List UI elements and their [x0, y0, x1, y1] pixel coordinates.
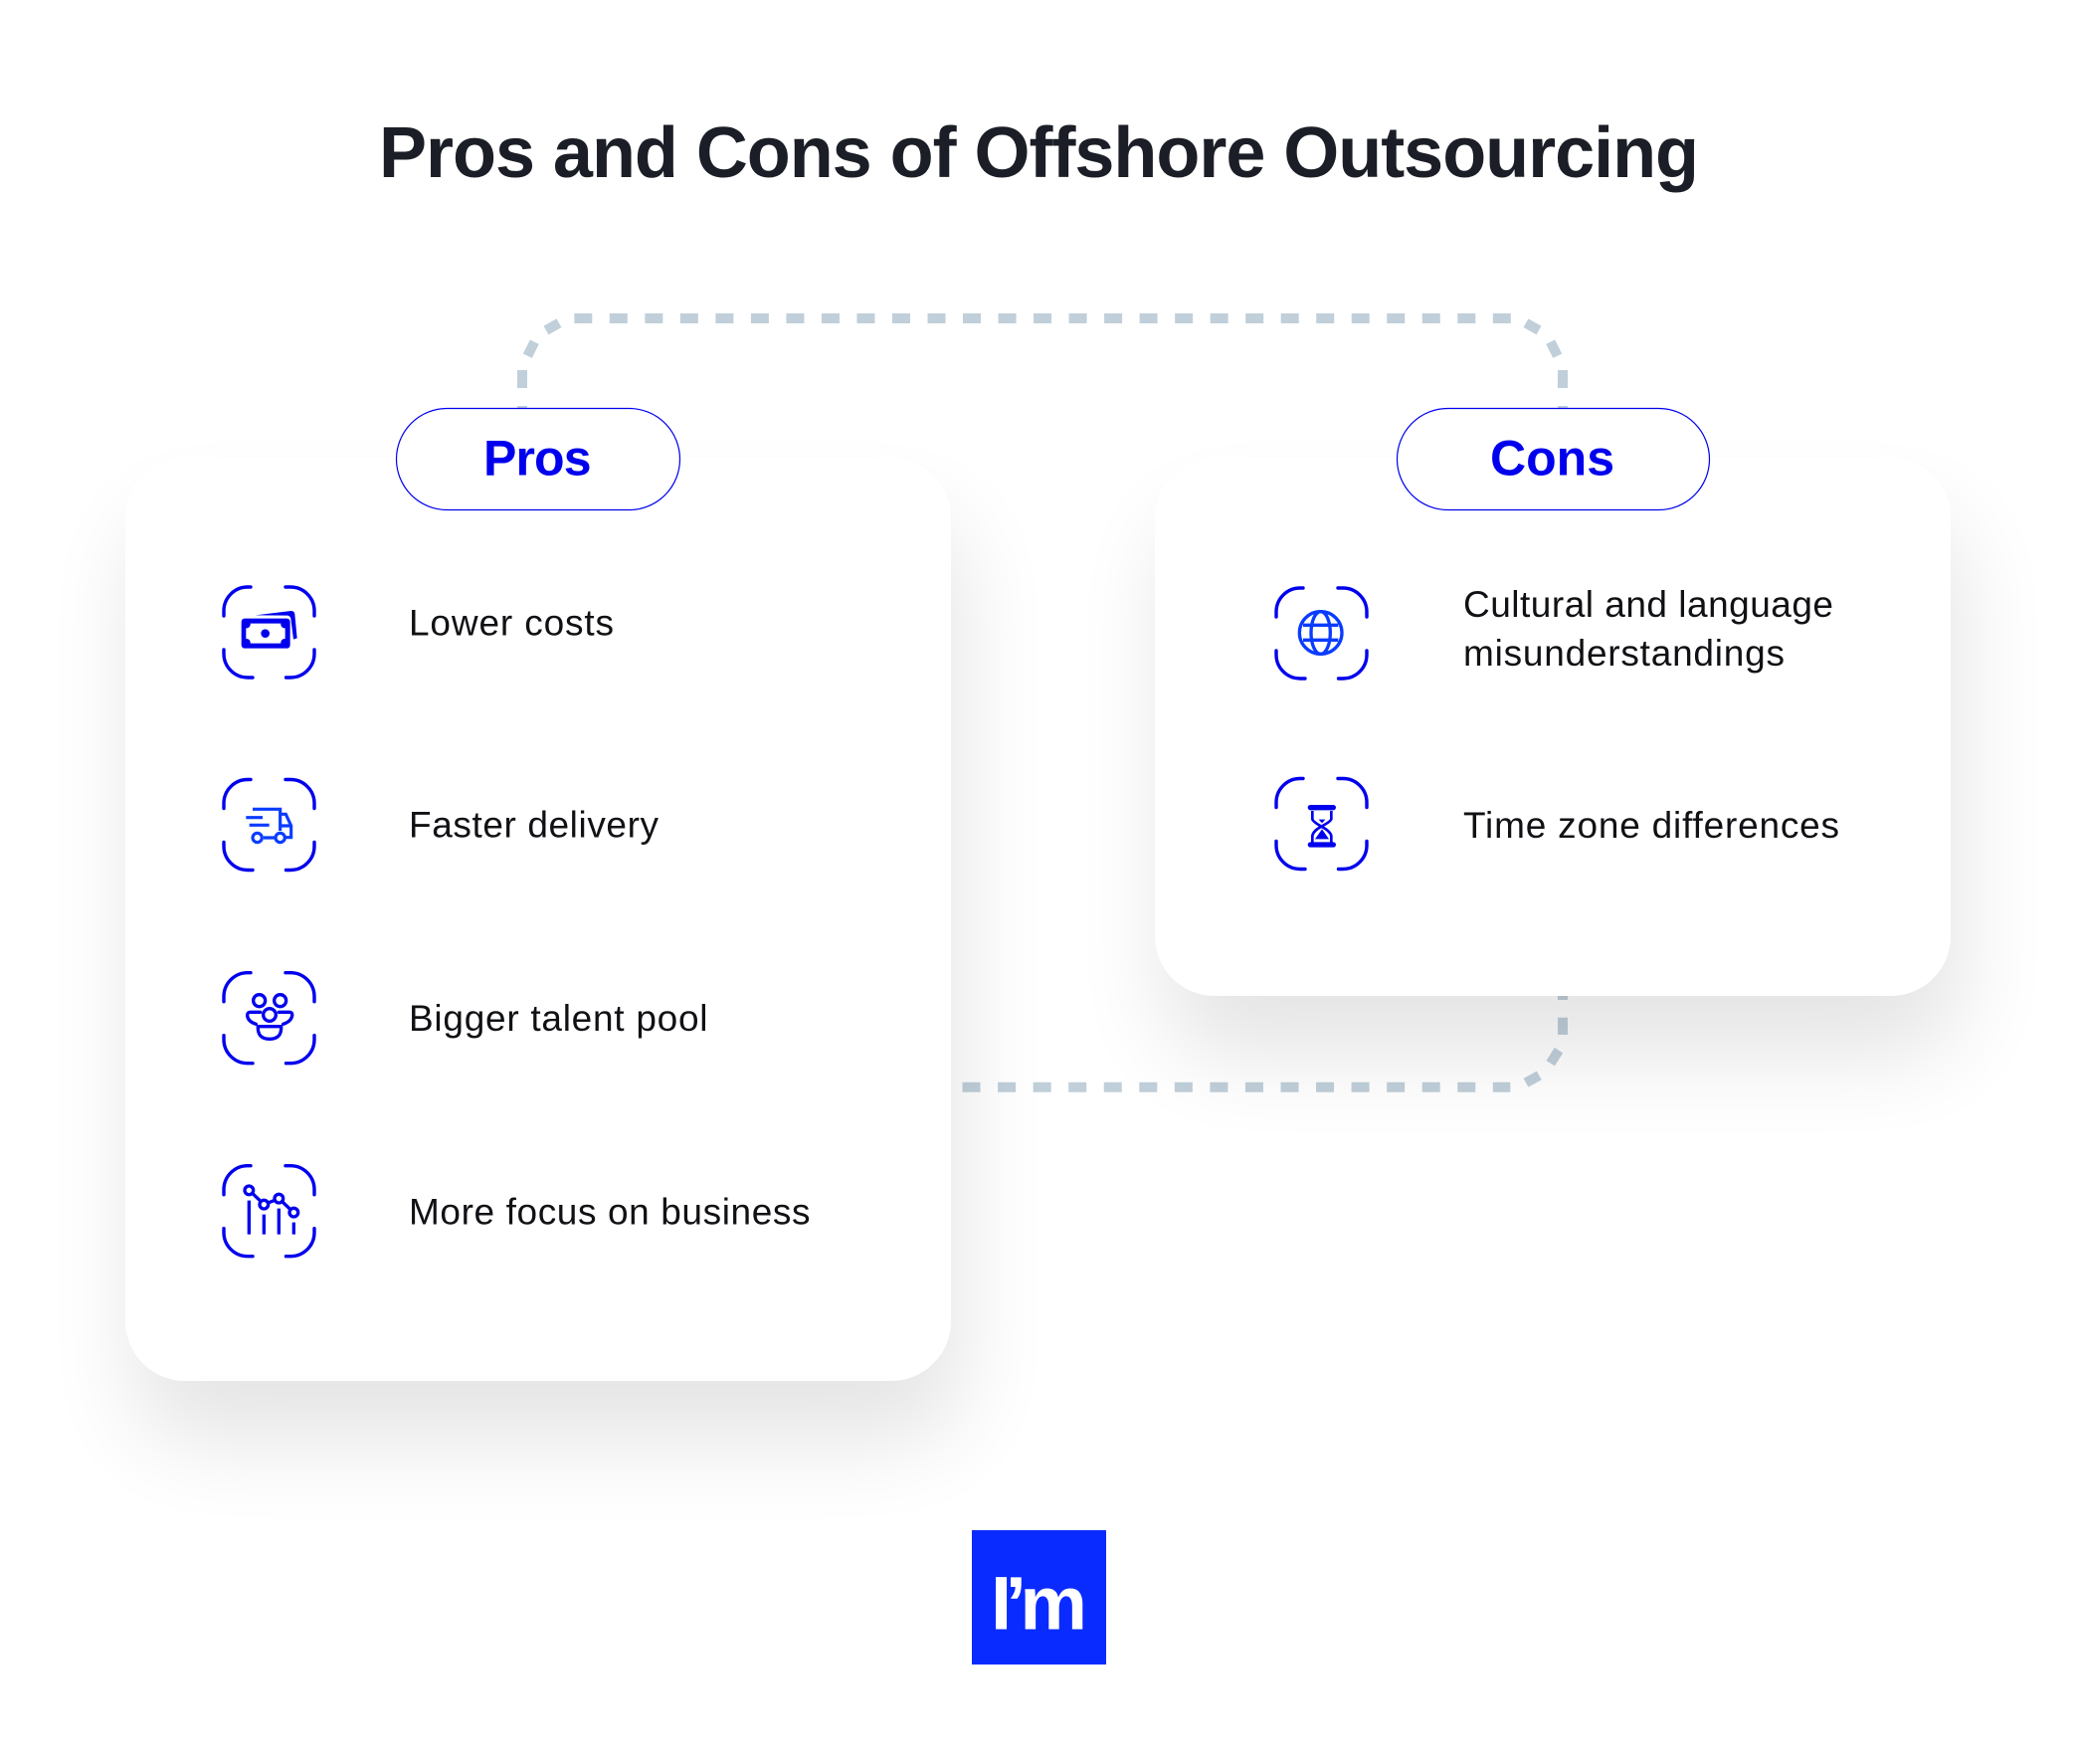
icon: team: [224, 973, 314, 1064]
logo: I’m: [991, 1561, 1087, 1646]
panel: pros: [125, 458, 951, 1381]
item: bigger talent pool: [224, 973, 708, 1064]
item: lower costs: [224, 587, 614, 678]
title: Pros and Cons of Offshore Outsourcing: [379, 113, 1699, 193]
label: faster delivery: Faster delivery: [409, 804, 659, 845]
item: cultural and language misunderstandings: [1276, 584, 1833, 679]
icon: globe: [1276, 588, 1367, 679]
panel: cons: [1155, 458, 1951, 996]
label: lower costs: Lower costs: [409, 603, 614, 644]
pros pill: Pros: [483, 431, 591, 487]
cons pill: [1397, 408, 1709, 509]
pros pill: [396, 408, 680, 509]
label: bigger talent pool: Bigger talent pool: [409, 998, 708, 1039]
icon: line and bar chart: [224, 1166, 314, 1257]
item: faster delivery: [224, 780, 659, 870]
icon: delivery truck: [224, 780, 314, 870]
item: more focus on business: [224, 1166, 810, 1257]
cons pill: Cons: [1490, 431, 1614, 487]
icon: money: [224, 587, 314, 678]
label: cultural and language misunderstandings: [1463, 584, 1833, 674]
label: more focus on business: More focus on business: [409, 1192, 810, 1232]
label: cultural and language misunderstandings: misunderstandings: [1463, 633, 1785, 674]
label: cultural and language misunderstandings: Cultural and language: [1463, 584, 1833, 625]
item: time zone differences: [1276, 778, 1839, 870]
logo: [972, 1530, 1106, 1665]
label: time zone differences: Time zone differences: [1463, 805, 1839, 846]
icon: hourglass: [1276, 778, 1367, 870]
